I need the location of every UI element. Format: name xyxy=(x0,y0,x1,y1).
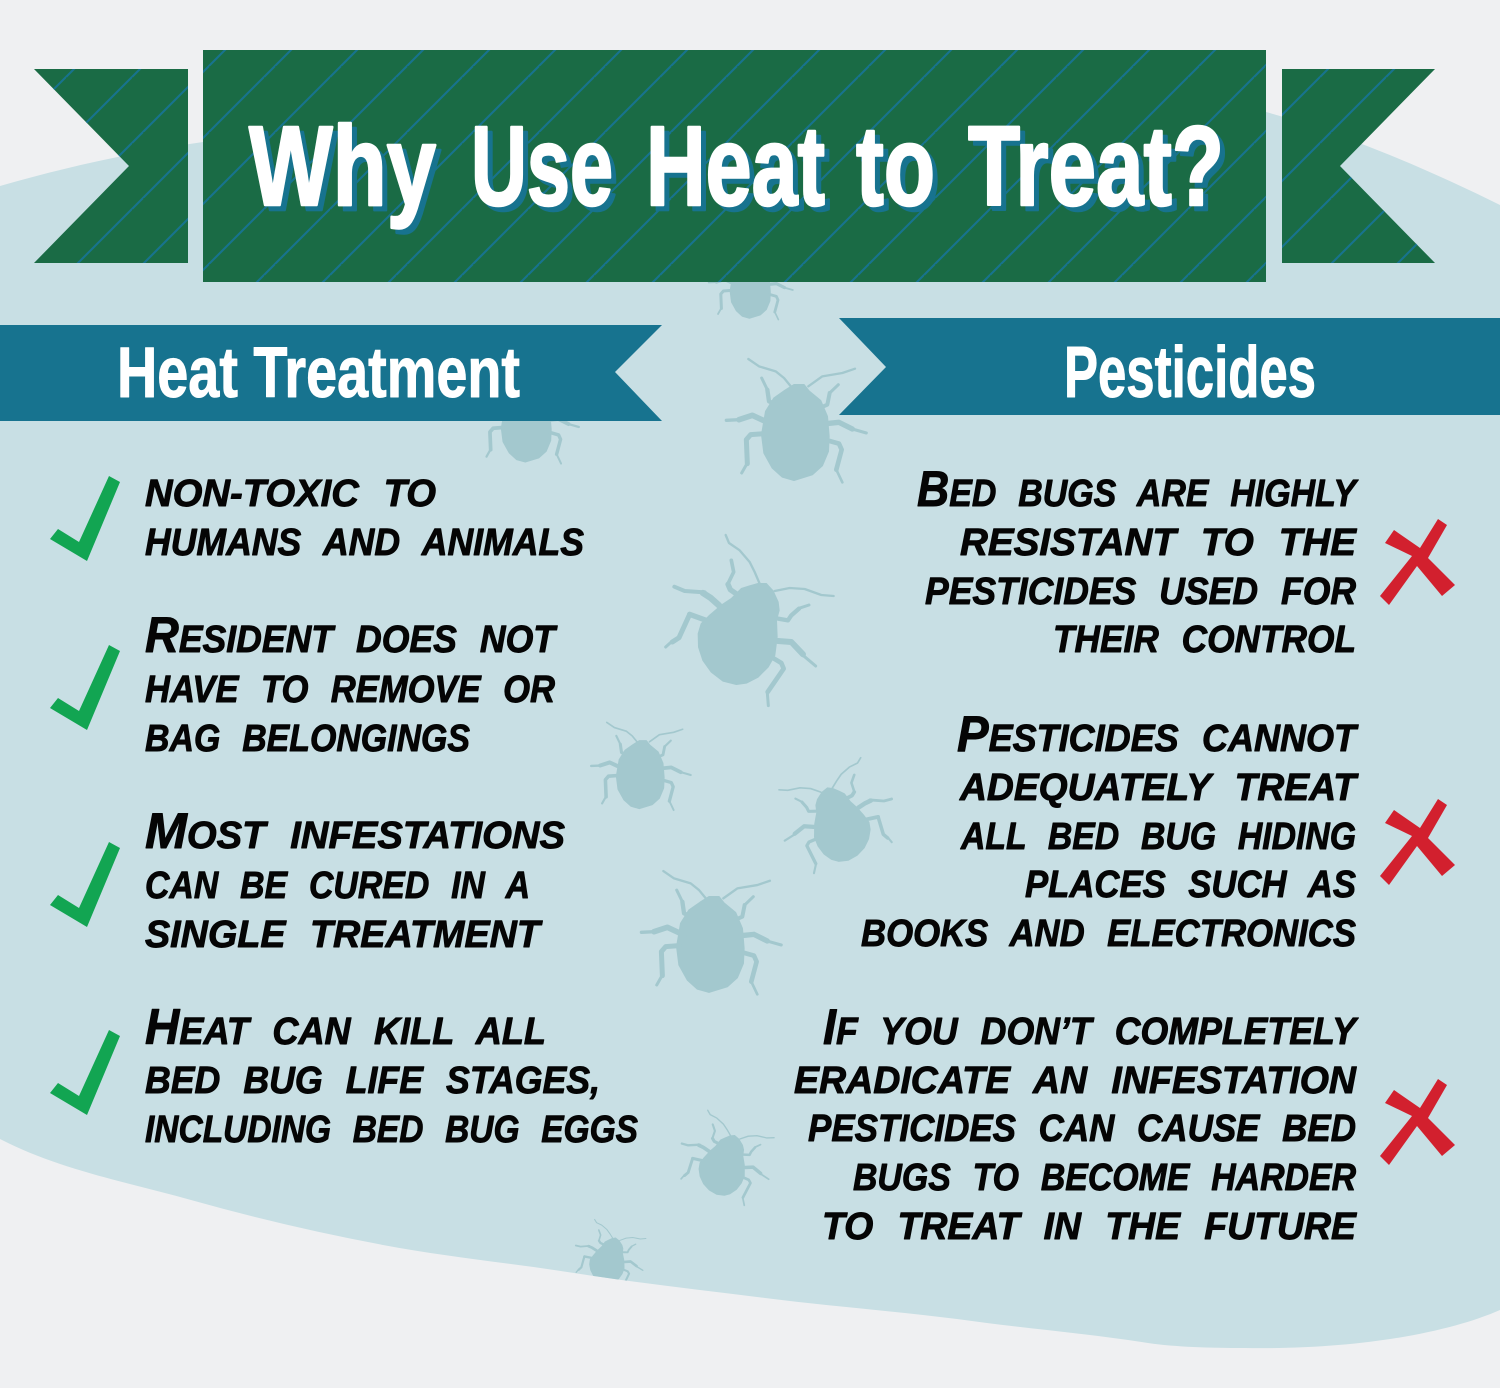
icon: cross 3 xyxy=(1380,1079,1455,1165)
title banner right tail xyxy=(1282,69,1435,263)
drawback text 2: ADEQUATELY TREAT xyxy=(959,767,1359,809)
benefit text 4: HEAT CAN KILL ALL xyxy=(145,999,546,1055)
drawback text 3: TO TREAT IN THE FUTURE xyxy=(822,1206,1358,1248)
benefit text 1 xyxy=(145,473,584,564)
heading: pesticides: Pesticides xyxy=(1064,333,1316,413)
icon: check 2 xyxy=(50,645,120,730)
title: Why xyxy=(249,103,436,229)
drawback text 3: BUGS TO BECOME HARDER xyxy=(853,1157,1356,1199)
benefit text 3 xyxy=(145,803,565,956)
icon: check 1 xyxy=(50,476,120,561)
drawback text 1 xyxy=(917,461,1359,661)
title xyxy=(249,103,1224,229)
drawback text 3: IF YOU DON’T COMPLETELY xyxy=(823,999,1359,1055)
title: Treat? xyxy=(968,103,1224,229)
benefit text 1: HUMANS AND ANIMALS xyxy=(145,522,584,564)
benefit text 2 xyxy=(145,607,558,760)
ribbon: heat treatment xyxy=(0,325,662,421)
title: to xyxy=(856,103,935,229)
title: Heat xyxy=(646,103,825,229)
title: Use xyxy=(471,103,613,229)
benefit text 4: INCLUDING BED BUG EGGS xyxy=(145,1109,638,1151)
benefit text 2: BAG BELONGINGS xyxy=(145,718,470,760)
drawback text 3: ERADICATE AN INFESTATION xyxy=(794,1060,1358,1102)
drawback text 1: PESTICIDES USED FOR xyxy=(925,571,1357,613)
heading: heat treatment: Heat Treatment xyxy=(117,334,520,413)
drawback text 2: PLACES SUCH AS xyxy=(1025,864,1356,906)
ribbon: pesticides xyxy=(839,318,1500,415)
drawback text 1: RESISTANT TO THE xyxy=(960,522,1358,564)
drawback text 2: ALL BED BUG HIDING xyxy=(960,816,1356,858)
title banner left tail xyxy=(34,69,188,263)
icon: check 4 xyxy=(50,1030,120,1115)
benefit text 3: SINGLE TREATMENT xyxy=(145,914,543,956)
benefit text 2: RESIDENT DOES NOT xyxy=(145,607,558,663)
benefit text 4: BED BUG LIFE STAGES, xyxy=(145,1060,600,1102)
benefit text 3: CAN BE CURED IN A xyxy=(145,865,530,907)
icon: cross 2 xyxy=(1380,799,1455,885)
drawback text 1: THEIR CONTROL xyxy=(1053,619,1356,661)
title banner xyxy=(203,50,1266,282)
decorative bed bug silhouettes xyxy=(475,246,903,1298)
drawback text 1: BED BUGS ARE HIGHLY xyxy=(917,461,1359,517)
icon: check 3 xyxy=(50,842,120,927)
drawback text 2: PESTICIDES CANNOT xyxy=(957,706,1359,762)
drawback text 2 xyxy=(861,706,1359,955)
icon: cross 1 xyxy=(1380,519,1455,605)
drawback text 3 xyxy=(794,999,1359,1248)
benefit text 2: HAVE TO REMOVE OR xyxy=(145,669,556,711)
drawback text 3: PESTICIDES CAN CAUSE BED xyxy=(808,1108,1356,1150)
benefit text 1: NON-TOXIC TO xyxy=(145,473,436,515)
benefit text 4 xyxy=(145,999,638,1151)
drawback text 2: BOOKS AND ELECTRONICS xyxy=(861,913,1356,955)
benefit text 3: MOST INFESTATIONS xyxy=(145,803,565,859)
